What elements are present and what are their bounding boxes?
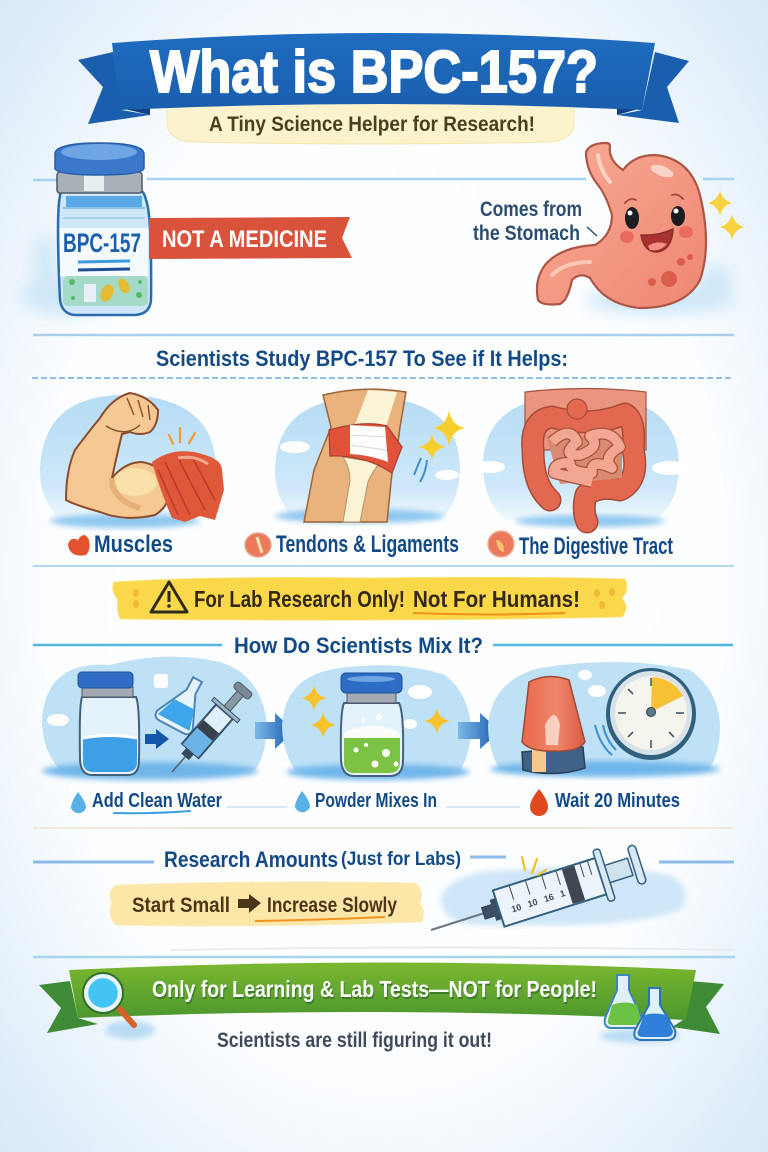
wash behind large syringe <box>440 867 686 925</box>
icon: magnifying glass <box>83 973 134 1025</box>
icon: warning triangle <box>151 582 187 612</box>
plaque: start small increase slowly <box>110 882 424 926</box>
heading: how do scientists mix it: How Do Scientists Mix It? <box>234 633 483 658</box>
icon: red cylinder <box>522 676 585 774</box>
arrow: step one to two <box>255 713 294 749</box>
dashed divider <box>32 377 731 379</box>
icon: knee sparkles <box>418 410 465 460</box>
label: wait 20 minutes <box>530 789 680 816</box>
green ribbon <box>39 962 724 1034</box>
subtitle plaque: A Tiny Science Helper for Research! <box>209 113 535 136</box>
icon: large syringe: 10 <box>510 902 523 914</box>
plaque: start small increase slowly: Increase Slowly <box>267 894 397 917</box>
icon: small arrow <box>145 729 169 749</box>
warning banner: Not For Humans! <box>413 586 580 612</box>
tag: not a medicine <box>149 217 352 259</box>
label: digestive tract <box>488 531 673 560</box>
icon: knee <box>304 389 406 522</box>
heading: research amounts <box>33 847 734 872</box>
watercolor wash: left and right <box>20 235 735 315</box>
heading: research amounts: Research Amounts <box>164 847 338 872</box>
label: tendons and ligaments: Tendons & Ligaments <box>276 531 459 558</box>
panel: wait 20 minutes <box>488 662 720 777</box>
plaque: start small increase slowly: Start Small <box>132 894 230 917</box>
icon: tick marks by syringe <box>522 857 546 875</box>
divider: double line <box>33 948 735 957</box>
label: add clean water <box>71 790 222 813</box>
panel: powder mixes in <box>282 665 471 780</box>
label: muscles <box>68 531 173 558</box>
icon: syringe <box>159 676 258 783</box>
panel: add clean water <box>42 657 267 783</box>
icon: large syringe <box>423 838 649 956</box>
divider: below labels <box>33 565 734 567</box>
icon: blue flask <box>634 988 675 1040</box>
icon: water vial <box>78 672 139 775</box>
warning banner <box>113 577 627 620</box>
icon: flask <box>154 670 214 736</box>
label: digestive tract: The Digestive Tract <box>519 533 673 560</box>
label: tendons and ligaments <box>245 531 459 558</box>
vial contents <box>63 276 148 306</box>
icon: clock <box>606 668 696 760</box>
icon: intestines <box>525 388 646 522</box>
washes under green ribbon <box>105 1021 680 1043</box>
icon: flasks <box>605 975 675 1040</box>
label: powder mixes in: Powder Mixes In <box>315 790 437 812</box>
icon: large syringe: 10 <box>526 897 539 909</box>
icon: BPC-157 vial <box>55 143 151 315</box>
text: scientists still figuring it out: Scientists are still figuring it out! <box>217 1029 492 1052</box>
title ribbon: What is BPC-157? <box>150 39 598 105</box>
heading: research amounts: (Just for Labs) <box>341 849 461 870</box>
text: comes from the stomach <box>473 198 597 245</box>
text: comes from the stomach: Comes from <box>480 198 582 221</box>
tag: not a medicine: NOT A MEDICINE <box>162 226 327 253</box>
icon: large syringe: 16 <box>543 892 555 904</box>
icon: green flask <box>605 975 642 1028</box>
green ribbon: Only for Learning & Lab Tests—NOT for People! <box>153 978 598 1004</box>
green ribbon: Only for Learning & Lab Tests—NOT for People! <box>152 976 597 1002</box>
divider: top <box>33 179 734 180</box>
label: muscles: Muscles <box>94 531 173 558</box>
warning banner: For Lab Research Only! <box>194 586 405 612</box>
label: wait 20 minutes: Wait 20 Minutes <box>555 790 680 812</box>
icon: flexed arm <box>66 393 224 522</box>
panel: muscles <box>40 393 224 528</box>
icon: large syringe: 1 <box>559 888 567 899</box>
text: comes from the stomach: the Stomach <box>473 222 580 245</box>
divider: above study heading <box>33 334 734 336</box>
heading: scientists study: Scientists Study BPC-157 To See if It Helps: <box>156 346 568 371</box>
label: powder mixes in <box>295 790 437 812</box>
icon: yellow sparkles <box>301 685 450 738</box>
icon: sparkles near stomach <box>708 190 744 240</box>
icon: green vial <box>341 673 403 776</box>
title ribbon <box>78 33 689 144</box>
arrow: step two to three <box>458 713 500 749</box>
panel: digestive tract <box>475 388 688 527</box>
divider: below mix <box>33 827 734 829</box>
icon: BPC-157 vial: BPC-157 <box>63 228 141 258</box>
subtitle plaque <box>167 100 574 144</box>
label: add clean water: Add Clean Water <box>92 790 222 812</box>
icon: smiling stomach <box>537 143 706 308</box>
panel: tendons and ligaments <box>275 389 465 523</box>
